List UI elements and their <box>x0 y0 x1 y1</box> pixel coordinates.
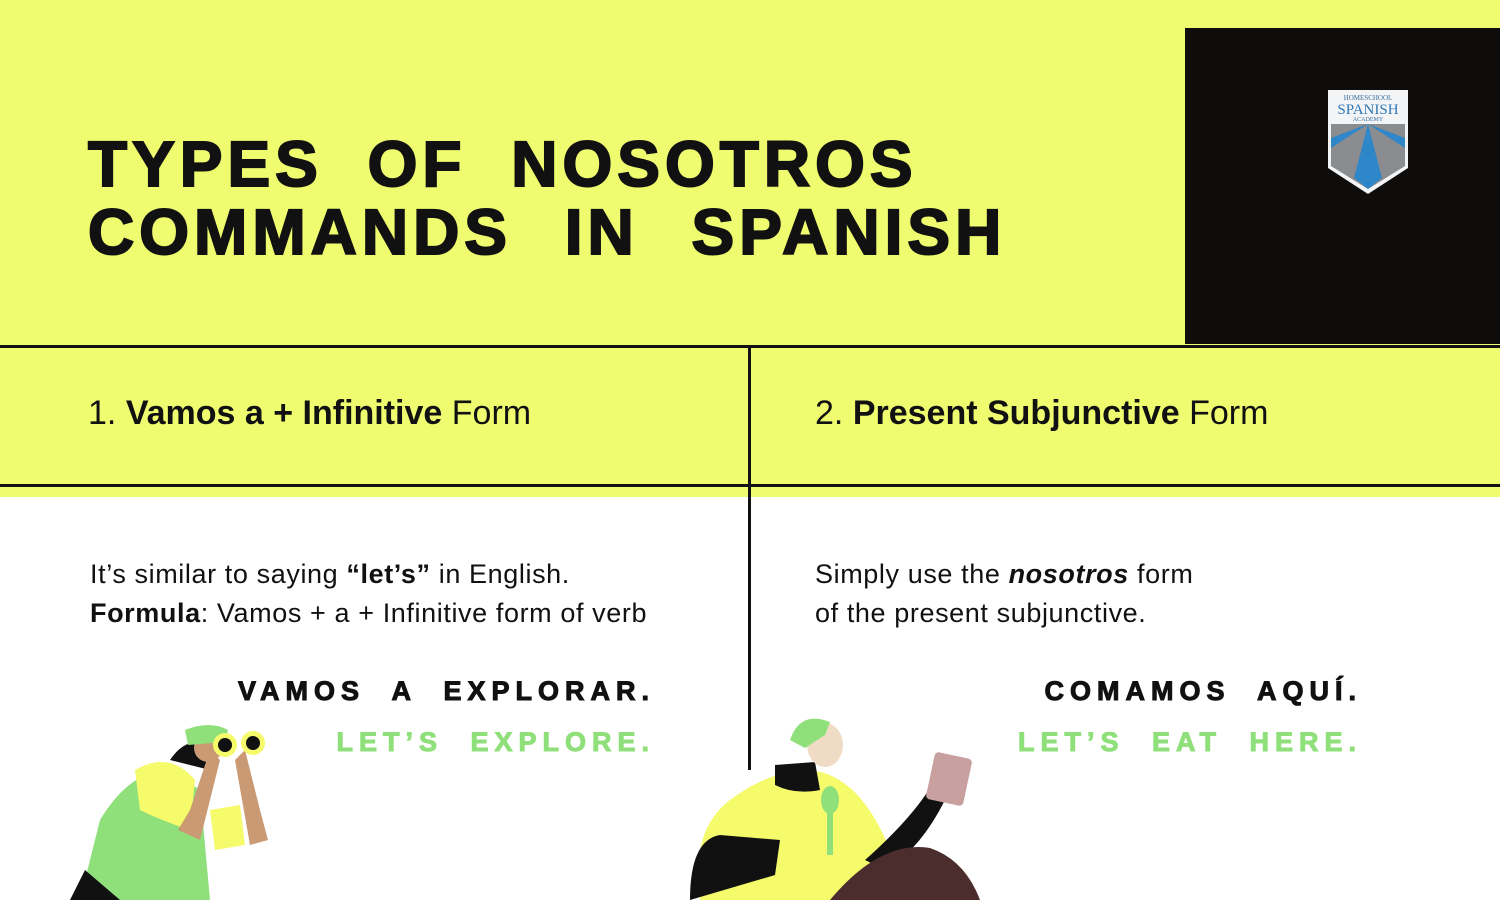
logo panel <box>1185 28 1500 344</box>
icon: academy shield logo: HOMESCHOOL <box>1344 94 1392 102</box>
example: vamos a explorar: VAMOS A EXPLORAR. <box>238 676 655 706</box>
header background <box>0 0 1500 345</box>
text: vamos a explanation <box>90 559 647 628</box>
icon: academy shield logo: SPANISH <box>1337 102 1399 118</box>
subheading: vamos a: 1. Vamos a + Infinitive Form <box>88 394 531 432</box>
text: subjunctive explanation: Simply use the nosotros form <box>815 559 1193 589</box>
example: let's explore: LET’S EXPLORE. <box>336 727 655 757</box>
example: let's eat here: LET’S EAT HERE. <box>1018 727 1362 757</box>
divider line vertical <box>748 345 751 770</box>
text: subjunctive explanation <box>815 559 1193 628</box>
example: comamos aquí: COMAMOS AQUÍ. <box>1044 676 1362 706</box>
text: vamos a explanation: It’s similar to saying “let’s” in English. <box>90 559 570 589</box>
subheading band <box>0 345 1500 497</box>
illustration: person with binoculars <box>70 725 268 900</box>
icon: academy shield logo: ACADEMY <box>1353 117 1384 123</box>
subheading: present subjunctive: 2. Present Subjunctive Form <box>815 394 1268 432</box>
title: TYPES OF NOSOTROS <box>88 128 918 200</box>
title <box>88 128 1006 268</box>
title: COMMANDS IN SPANISH <box>88 196 1006 268</box>
text: vamos a explanation: Formula: Vamos + a + Infinitive form of verb <box>90 598 647 628</box>
icon: academy shield logo <box>1328 90 1408 194</box>
text: subjunctive explanation: of the present subjunctive. <box>815 598 1146 628</box>
illustration: cook with soup can <box>690 718 980 900</box>
